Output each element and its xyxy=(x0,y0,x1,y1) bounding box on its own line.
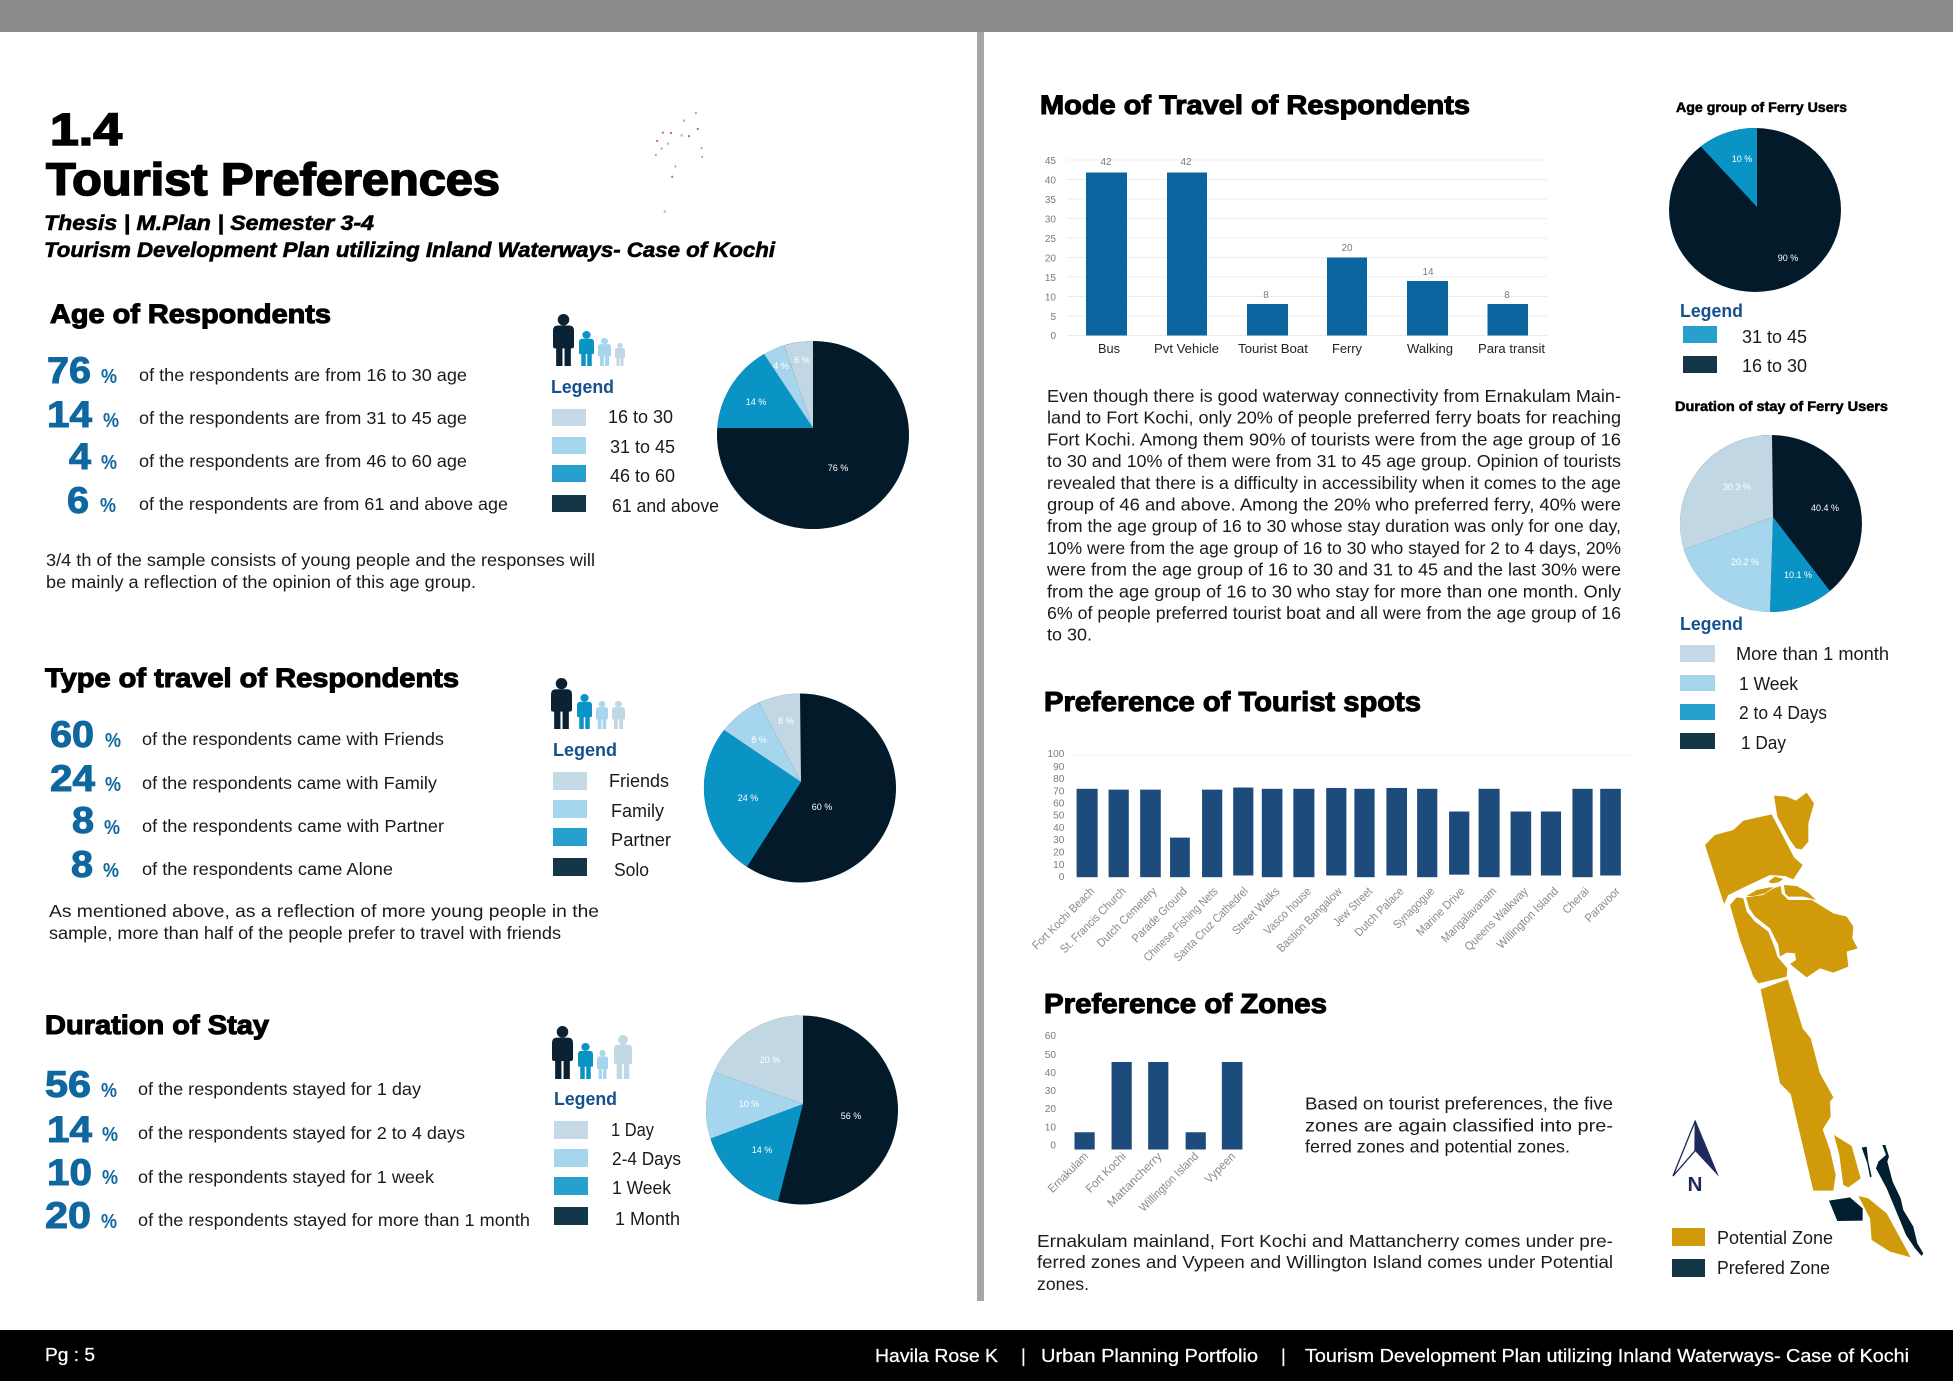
legend: 1 Week xyxy=(612,1178,672,1198)
bar chart: tourist spots: 60 xyxy=(1053,798,1065,809)
heading: Age group of Ferry Users xyxy=(1676,100,1847,115)
legend xyxy=(554,1089,681,1229)
stat: 14 percent: % xyxy=(102,1124,118,1146)
bar chart: tourist spots: 20 xyxy=(1053,848,1065,859)
legend: Legend xyxy=(553,740,617,760)
icon: people xyxy=(553,314,625,366)
note text: be mainly a reflection of the opinion of this age group. xyxy=(46,572,476,592)
paragraph: ferry analysis: Even though there is good waterway connectivity from Ernakulam Main- xyxy=(1047,386,1621,406)
bar chart: tourist spots: Dutch Cemetery xyxy=(1094,885,1160,950)
stat: 10 percent: of the respondents stayed for 1 week xyxy=(138,1167,434,1187)
bar chart: mode of travel: 45 xyxy=(1045,156,1056,167)
bar chart: tourist spots: Bastion Bangalow xyxy=(1275,885,1345,955)
legend: Legend xyxy=(554,1089,617,1109)
stat: 60 percent: 60 xyxy=(50,714,94,755)
heading: duration of stay: Duration of Stay xyxy=(45,1010,269,1040)
bar chart: tourist spots: Marine Drive xyxy=(1414,885,1468,939)
panel: duration of stay xyxy=(45,1010,898,1236)
legend: Partner xyxy=(611,830,671,850)
legend xyxy=(553,740,671,880)
legend: 46 to 60 xyxy=(610,466,675,486)
pie chart: ferry duration: 30.3 % xyxy=(1723,482,1751,492)
text: zone classification: zones are again classified into pre- xyxy=(1305,1116,1613,1136)
legend: 31 to 45 xyxy=(1742,327,1807,347)
bar chart: mode of travel: 0 xyxy=(1050,331,1056,342)
pie chart: travel type: 60 % xyxy=(812,802,832,812)
bar chart: tourist spots: Willington Island xyxy=(1494,885,1561,951)
text: zone summary: Ernakulam mainland, Fort Kochi and Mattancherry comes under pre- xyxy=(1037,1231,1613,1251)
legend: 16 to 30 xyxy=(608,407,673,427)
stat: 8 percent partner: % xyxy=(104,817,120,839)
legend: Family xyxy=(611,801,664,821)
legend: 1 Month xyxy=(615,1209,680,1229)
map legend xyxy=(1672,1228,1833,1278)
panel: preference of zones xyxy=(1037,988,1613,1294)
bar chart: mode of travel xyxy=(1045,156,1547,356)
stat: 8 percent partner: 8 xyxy=(72,800,94,841)
bar chart: zones: Fort Kochi xyxy=(1083,1150,1129,1196)
bar chart: zones: Vypeen xyxy=(1202,1150,1238,1186)
bar chart: tourist spots: Queens Walkway xyxy=(1462,885,1531,954)
bar chart: zones: 30 xyxy=(1045,1086,1056,1097)
footer credits: Tourism Development Plan utilizing Inland Waterways- Case of Kochi xyxy=(1305,1346,1909,1366)
note text: As mentioned above, as a reflection of more young people in the xyxy=(49,901,599,921)
bar chart: tourist spots: Santa Cruz Cathedrel xyxy=(1171,885,1251,964)
legend: 16 to 30 xyxy=(1742,356,1807,376)
heading: mode of travel: Mode of Travel of Respondents xyxy=(1040,90,1470,120)
pie chart: age: 76 % xyxy=(828,463,848,473)
bar chart: tourist spots: Synagogue xyxy=(1391,885,1438,932)
pie chart: age: 14 % xyxy=(746,397,766,407)
subtitle line two: Tourism Development Plan utilizing Inland Waterways- Case of Kochi xyxy=(44,239,776,262)
stat: 60 percent xyxy=(50,714,444,755)
bar chart: mode of travel: Bus xyxy=(1098,341,1120,356)
icon: north arrow xyxy=(1673,1120,1719,1196)
bar chart: mode of travel: Tourist Boat xyxy=(1238,341,1308,356)
stat: 8 percent alone: of the respondents came Alone xyxy=(142,859,393,879)
bar chart: zones: 50 xyxy=(1045,1050,1056,1061)
pie chart: duration: 20 % xyxy=(760,1055,780,1065)
stat: 76 percent: % xyxy=(101,366,117,388)
stat: 4 percent xyxy=(69,436,467,477)
stat: 20 percent: % xyxy=(101,1211,117,1233)
bar chart: mode of travel: Walking xyxy=(1407,341,1453,356)
stat: 24 percent xyxy=(50,758,437,799)
pie chart: age: 6 % xyxy=(794,355,810,365)
bar chart: mode of travel: 10 xyxy=(1045,292,1056,304)
stat: 14 percent: 14 xyxy=(47,394,92,435)
stat: 20 percent: 20 xyxy=(45,1195,91,1236)
heading: Preference of Tourist spots xyxy=(1044,686,1421,717)
bar chart: zones: 0 xyxy=(1050,1141,1056,1152)
text: zone summary: zones. xyxy=(1037,1274,1089,1294)
pie chart: ferry duration: 10.1 % xyxy=(1784,570,1812,580)
paragraph: ferry analysis xyxy=(1046,386,1621,645)
note text xyxy=(46,550,595,592)
pie chart: duration xyxy=(706,1015,898,1204)
bar chart: zones xyxy=(1045,1031,1242,1215)
page number: Pg : 5 xyxy=(45,1345,95,1365)
note text: sample, more than half of the people prefer to travel with friends xyxy=(49,923,561,943)
paragraph: ferry analysis: group of 46 and above. Among the 20% who preferred ferry, 40% were xyxy=(1047,494,1621,514)
bar chart: tourist spots: 100 xyxy=(1048,749,1065,760)
stat: 76 percent: of the respondents are from 16 to 30 age xyxy=(139,365,467,385)
footer credits: Havila Rose K xyxy=(875,1346,998,1366)
stat: 60 percent: of the respondents came with Friends xyxy=(142,729,444,749)
stat: 76 percent xyxy=(47,350,467,391)
stat: 6 percent: of the respondents are from 61 and above age xyxy=(139,494,508,514)
bar chart: mode of travel: Ferry xyxy=(1332,341,1362,356)
stat: 56 percent xyxy=(45,1064,421,1105)
bar chart: mode of travel: 8 xyxy=(1263,290,1269,301)
map legend: Potential Zone xyxy=(1717,1228,1833,1248)
bar chart: mode of travel: 14 xyxy=(1422,267,1434,278)
footer bar xyxy=(0,1330,1953,1381)
bar chart: tourist spots: Jew Street xyxy=(1331,884,1375,929)
map legend: Prefered Zone xyxy=(1717,1258,1830,1278)
pie chart: age xyxy=(717,341,909,529)
legend: 61 and above xyxy=(612,496,719,516)
panel: age of respondents xyxy=(46,299,909,592)
bar chart: mode of travel: 35 xyxy=(1045,195,1056,206)
stat: 56 percent: of the respondents stayed for 1 day xyxy=(138,1079,421,1099)
pie chart: ferry duration xyxy=(1680,435,1862,612)
pie chart: travel type: 8 % xyxy=(751,735,767,745)
pie chart: duration: 10 % xyxy=(739,1099,759,1109)
legend: 2-4 Days xyxy=(612,1149,681,1169)
bar chart: tourist spots: Paravoor xyxy=(1582,885,1623,925)
text: zone classification: Based on tourist preferences, the five xyxy=(1305,1094,1613,1114)
legend xyxy=(1680,614,1889,753)
stat: 10 percent: % xyxy=(102,1167,118,1189)
footer credits: | xyxy=(1021,1346,1026,1366)
bar chart: mode of travel: 25 xyxy=(1045,234,1056,245)
bar chart: tourist spots: 90 xyxy=(1053,762,1065,773)
bar chart: zones: 40 xyxy=(1045,1068,1056,1079)
stat: 10 percent xyxy=(47,1152,434,1193)
bar chart: mode of travel: 40 xyxy=(1045,176,1056,186)
bar chart: mode of travel: 8 xyxy=(1504,290,1510,301)
pie chart: ferry duration: 40.4 % xyxy=(1811,503,1839,513)
paragraph: ferry analysis: were from the age group of 16 to 30 and 31 to 45 and the last 30% were xyxy=(1046,560,1621,580)
text: zone classification: ferred zones and potential zones. xyxy=(1305,1136,1570,1156)
stat: 4 percent: of the respondents are from 46 to 60 age xyxy=(139,451,467,471)
text: zone classification xyxy=(1305,1094,1613,1156)
bar chart: tourist spots xyxy=(1030,749,1631,964)
bar chart: mode of travel: 42 xyxy=(1180,157,1192,168)
legend: 1 Day xyxy=(611,1120,654,1140)
icon: north arrow: N xyxy=(1688,1174,1702,1196)
legend: 1 Week xyxy=(1739,674,1799,694)
map: zones of Kochi xyxy=(1705,793,1923,1257)
stat: 4 percent: % xyxy=(101,452,117,474)
stat: 56 percent: 56 xyxy=(45,1064,91,1105)
legend: Legend xyxy=(1680,301,1743,321)
footer credits xyxy=(875,1346,1909,1366)
stat: 14 percent xyxy=(47,1109,465,1150)
paragraph: ferry analysis: Fort Kochi. Among them 90% of tourists were from the age group of 16 xyxy=(1047,429,1621,449)
bar chart: mode of travel: 42 xyxy=(1100,157,1112,168)
stat: 14 percent: of the respondents are from 31 to 45 age xyxy=(139,408,467,428)
bar chart: tourist spots: Mangalavanam xyxy=(1439,885,1499,945)
bar chart: tourist spots: Dutch Palace xyxy=(1352,885,1407,939)
decorative dots xyxy=(655,112,703,213)
bar chart: mode of travel: Pvt Vehicle xyxy=(1154,341,1219,356)
bar chart: tourist spots: Cherai xyxy=(1560,885,1592,917)
stat: 56 percent: % xyxy=(101,1080,117,1102)
pie chart: ferry duration: 20.2 % xyxy=(1731,557,1759,567)
text: zone summary xyxy=(1037,1231,1613,1294)
stat: 10 percent: 10 xyxy=(47,1152,92,1193)
paragraph: ferry analysis: to 30. xyxy=(1047,625,1092,645)
bar chart: mode of travel: Para transit xyxy=(1478,341,1545,356)
paragraph: ferry analysis: 6% of people preferred tourist boat and all were from the age group of 16 xyxy=(1047,603,1621,623)
stat: 8 percent partner: of the respondents came with Partner xyxy=(142,816,444,836)
bar chart: mode of travel: 30 xyxy=(1045,214,1056,226)
legend: Friends xyxy=(609,771,669,791)
pie chart: travel type: 24 % xyxy=(738,793,758,803)
bar chart: tourist spots: Fort Kochi Beach xyxy=(1030,885,1097,952)
bar chart: zones: Mattancherry xyxy=(1105,1150,1165,1210)
pie chart: ferry age: 90 % xyxy=(1778,253,1798,263)
paragraph: ferry analysis: from the age group of 16 to 30 who stay for more than one month. Only xyxy=(1047,581,1621,601)
legend: 1 Day xyxy=(1741,733,1786,753)
stat: 76 percent: 76 xyxy=(47,350,91,391)
stat: 8 percent alone: % xyxy=(103,860,119,882)
bar chart: mode of travel: 5 xyxy=(1050,312,1056,323)
note text xyxy=(49,901,599,943)
bar chart: mode of travel: 20 xyxy=(1045,254,1056,264)
footer credits: Urban Planning Portfolio xyxy=(1041,1346,1258,1366)
heading: type of travel: Type of travel of Respondents xyxy=(45,663,459,693)
top grey bar xyxy=(0,0,1953,32)
stat: 8 percent alone xyxy=(71,844,393,885)
bar chart: tourist spots: 50 xyxy=(1053,811,1065,822)
legend: 31 to 45 xyxy=(610,437,675,457)
bar chart: tourist spots: Vasco house xyxy=(1261,885,1314,937)
panel: type of travel xyxy=(45,663,896,943)
bar chart: zones: 20 xyxy=(1045,1104,1056,1115)
stat: 8 percent partner xyxy=(72,800,444,841)
icon: people xyxy=(551,678,625,729)
text: zone summary: ferred zones and Vypeen and Willington Island comes under Potential xyxy=(1037,1252,1613,1272)
bar chart: tourist spots: Street Walks xyxy=(1230,885,1283,937)
main title: Tourist Preferences xyxy=(46,154,500,205)
legend: 2 to 4 Days xyxy=(1739,703,1827,723)
panel: age group of ferry users xyxy=(1669,100,1847,376)
bar chart: tourist spots: Chinese Fishing Nets xyxy=(1141,885,1221,964)
stat: 4 percent: 4 xyxy=(69,436,91,477)
paragraph: ferry analysis: revealed that there is a difficulty in accessibility when it comes to the age xyxy=(1047,473,1621,493)
stat: 14 percent: of the respondents stayed for 2 to 4 days xyxy=(138,1123,465,1143)
note text: 3/4 th of the sample consists of young people and the responses will xyxy=(46,550,595,570)
legend: Solo xyxy=(614,860,649,880)
stat: 8 percent alone: 8 xyxy=(71,844,93,885)
bar chart: zones: Ernakulam xyxy=(1045,1150,1091,1196)
footer credits: | xyxy=(1281,1346,1286,1366)
bar chart: zones: Willington Island xyxy=(1137,1150,1201,1215)
bar chart: tourist spots: St. Francis Church xyxy=(1058,885,1129,956)
stat: 14 percent xyxy=(47,394,467,435)
bar chart: tourist spots: 40 xyxy=(1053,823,1065,834)
pie chart: duration: 14 % xyxy=(752,1145,772,1155)
stat: 60 percent: % xyxy=(105,730,121,752)
stat: 14 percent: 14 xyxy=(47,1109,92,1150)
pie chart: age: 4 % xyxy=(773,361,789,371)
stat: 6 percent: 6 xyxy=(67,480,89,521)
bar chart: zones: 60 xyxy=(1045,1031,1056,1042)
bar chart: tourist spots: 70 xyxy=(1053,786,1065,797)
legend xyxy=(551,377,719,516)
stat: 6 percent xyxy=(67,480,508,521)
bar chart: tourist spots: 0 xyxy=(1059,872,1065,883)
bar chart: tourist spots: 10 xyxy=(1053,860,1065,871)
panel: preference of tourist spots xyxy=(1030,686,1631,964)
icon: people xyxy=(552,1026,632,1079)
pie chart: travel type: 8 % xyxy=(778,716,794,726)
paragraph: ferry analysis: 10% were from the age group of 16 to 30 who stayed for 2 to 4 days, 20% xyxy=(1047,538,1621,558)
heading: Preference of Zones xyxy=(1044,988,1327,1019)
paragraph: ferry analysis: to 30 and 10% of them were from 31 to 45 age group. Opinion of tourists xyxy=(1047,451,1621,471)
bar chart: mode of travel: 15 xyxy=(1045,273,1056,284)
paragraph: ferry analysis: from the age group of 16 to 30 whose stay duration was only for one day, xyxy=(1047,516,1621,536)
panel: duration of stay of ferry users xyxy=(1675,399,1889,753)
panel: mode of travel xyxy=(1040,90,1621,645)
bar chart: tourist spots: 30 xyxy=(1053,835,1065,846)
stat: 24 percent: 24 xyxy=(50,758,95,799)
stat: 24 percent: of the respondents came with Family xyxy=(142,773,437,793)
subtitle line one: Thesis | M.Plan | Semester 3-4 xyxy=(44,212,374,235)
stat: 20 percent xyxy=(45,1195,530,1236)
pie chart: ferry age xyxy=(1669,128,1841,292)
bar chart: tourist spots: Parade Ground xyxy=(1129,885,1190,945)
centre page divider xyxy=(977,32,984,1301)
legend xyxy=(1680,301,1807,376)
heading: age of respondents: Age of Respondents xyxy=(50,299,331,329)
paragraph: ferry analysis: land to Fort Kochi, only 20% of people preferred ferry boats for reaching xyxy=(1047,408,1621,428)
title block xyxy=(44,104,776,262)
stat: 6 percent: % xyxy=(100,495,116,517)
legend: Legend xyxy=(1680,614,1743,634)
heading: Duration of stay of Ferry Users xyxy=(1675,399,1888,414)
legend: More than 1 month xyxy=(1736,644,1889,664)
stat: 14 percent: % xyxy=(103,410,119,432)
section number: 1.4 xyxy=(50,104,122,155)
stat: 24 percent: % xyxy=(105,774,121,796)
pie chart: duration: 56 % xyxy=(841,1111,861,1121)
bar chart: tourist spots: 80 xyxy=(1053,774,1065,785)
legend: Legend xyxy=(551,377,614,397)
stat: 20 percent: of the respondents stayed for more than 1 month xyxy=(138,1210,530,1230)
pie chart: ferry age: 10 % xyxy=(1732,154,1752,164)
pie chart: travel type xyxy=(704,694,896,882)
bar chart: zones: 10 xyxy=(1045,1123,1056,1134)
bar chart: mode of travel: 20 xyxy=(1341,243,1353,254)
